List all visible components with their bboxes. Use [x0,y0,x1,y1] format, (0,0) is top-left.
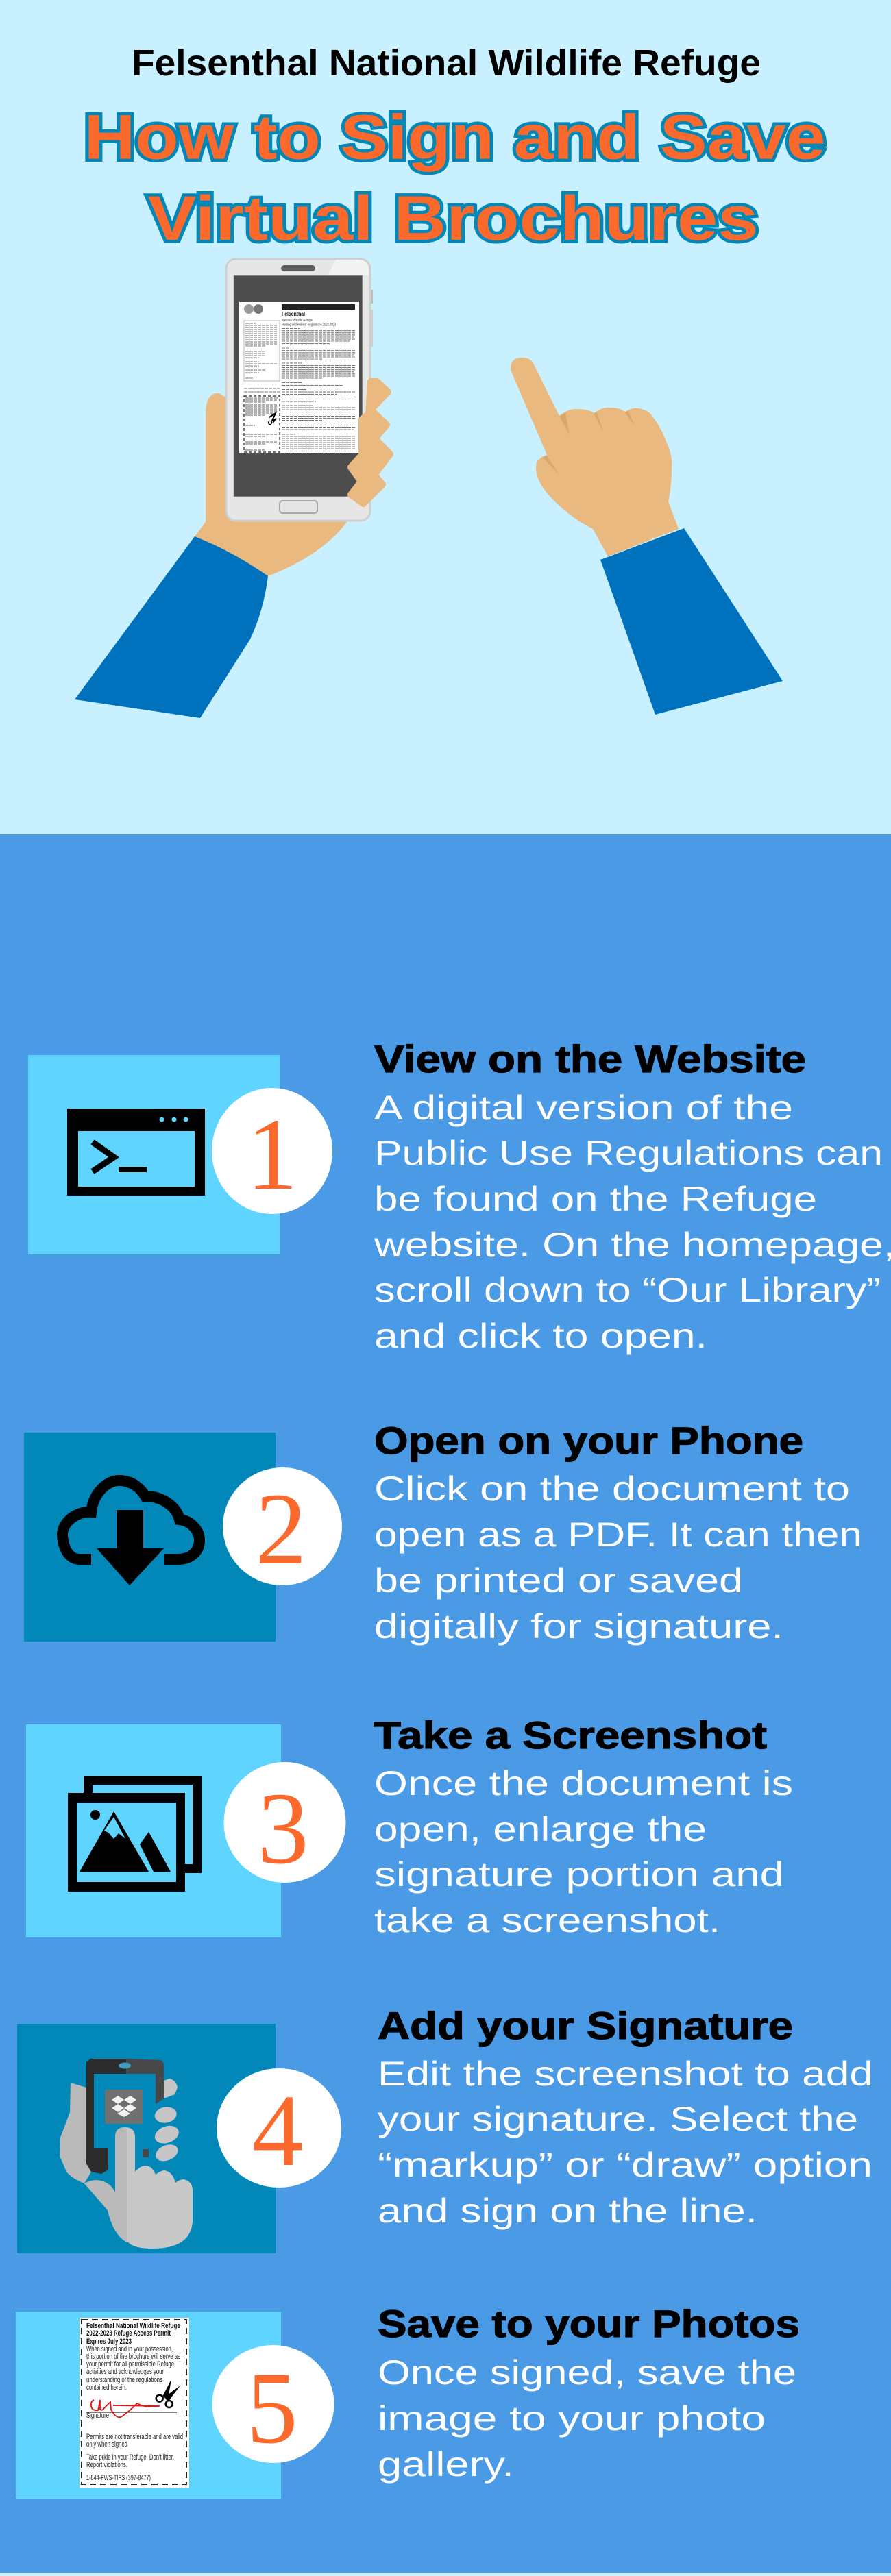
step 5 text: Once signed, save the [378,2353,796,2392]
signed permit ticket: Take pride in your Refuge. Don't litter. [86,2453,174,2462]
step 4 text: Edit the screenshot to add [378,2055,873,2093]
step 1 text: website. On the homepage, [374,1226,891,1264]
fingers [351,382,390,504]
signed permit ticket: understanding of the regulations [86,2376,162,2384]
step 4 text: and sign on the line. [378,2192,757,2230]
brochure on screen: Felsenthal [282,310,305,317]
panel: header [75,42,825,718]
step 1 text: Public Use Regulations can [374,1134,883,1172]
icon: image gallery [68,1776,202,1892]
number badge 1 [212,1088,332,1214]
signed permit ticket: only when signed [86,2440,127,2449]
number badge 1: 1 [247,1098,297,1211]
step 1 [28,1037,891,1355]
signed permit ticket: Expires July 2023 [86,2338,132,2346]
number badge 2: 2 [255,1472,307,1586]
signed permit ticket: Report violations. [86,2461,127,2469]
step 3 heading: Take a Screenshot [374,1713,767,1757]
step 1 text: be found on the Refuge [374,1180,817,1218]
step 1 text: A digital version of the [374,1089,793,1127]
step 1 text: and click to open. [374,1317,707,1355]
signed permit ticket: Felsenthal National Wildlife Refuge [86,2322,180,2330]
signed permit ticket: 2022-2023 Refuge Access Permit [86,2329,171,2338]
main title [84,103,825,253]
step 2 [24,1419,862,1646]
number badge 2 [223,1467,342,1586]
step 3 text: Once the document is [374,1764,793,1803]
step 2 text [374,1470,862,1646]
number badge 4: 4 [252,2074,303,2188]
signature scrawl [91,2400,160,2417]
step 1 heading: View on the Website [374,1037,806,1080]
signed permit ticket: Signature [86,2412,109,2420]
icon: terminal window [67,1109,205,1196]
step 4 text: your signature. Select the [378,2100,858,2138]
step 5 text: image to your photo [378,2399,766,2438]
step 2 text: be printed or saved [374,1561,743,1600]
main title: Virtual Brochures [148,184,758,253]
illustration: left hand holding phone [75,259,390,718]
step 4 icon box [17,2024,276,2253]
signed permit ticket: 1-844-FWS-TIPS (397-8477) [86,2474,151,2482]
signed permit ticket: When signed and in your possession, [86,2345,173,2353]
step 2 heading: Open on your Phone [374,1419,803,1462]
signed permit ticket [80,2318,189,2488]
icon: hand tapping phone [60,2059,193,2249]
brochure on screen [239,302,359,453]
step 5 icon box [16,2312,281,2499]
number badge 4 [217,2068,341,2188]
step 5 text [378,2353,796,2484]
refuge name heading: Felsenthal National Wildlife Refuge [132,42,761,84]
main title: How to Sign and Save [84,103,825,173]
step 3 text: open, enlarge the [374,1810,707,1848]
phone [226,259,373,521]
step 2 text: open as a PDF. It can then [374,1515,862,1554]
number badge 3: 3 [258,1772,308,1885]
number badge 5: 5 [247,2351,297,2465]
signed permit ticket: this portion of the brochure will serve as [86,2353,180,2361]
step 1 text [374,1089,891,1355]
step 3 icon box [26,1724,281,1937]
signed permit ticket: Permits are not transferable and are valid [86,2433,183,2441]
pointing hand [511,358,679,556]
step 2 text: Click on the document to [374,1470,850,1508]
step 1 text: scroll down to “Our Library” [374,1271,881,1309]
brochure on screen: National Wildlife Refuge [282,319,313,323]
step 5 [16,2302,800,2499]
illustration: right hand pointing [511,358,783,715]
step 2 text: digitally for signature. [374,1607,783,1646]
number badge 5 [212,2345,334,2465]
number badge 3 [223,1762,345,1885]
step 5 text: gallery. [378,2445,514,2484]
left sleeve [75,536,268,718]
right sleeve [600,528,783,715]
step 5 heading: Save to your Photos [378,2302,800,2345]
icon: cloud download [62,1481,199,1585]
knuckle folds [543,411,635,475]
palm [195,393,347,576]
icon: scissors [156,2379,180,2407]
signed permit ticket: activities and acknowledges your [86,2368,164,2376]
step 1 icon box [28,1055,280,1254]
signed permit ticket: your permit for all permissible Refuge [86,2360,174,2368]
step 4 [17,2004,873,2253]
step 3 text: signature portion and [374,1855,784,1894]
step 2 icon box [24,1433,276,1642]
signed permit ticket: contained herein. [86,2383,127,2392]
brochure on screen: Hunting and Harvest Regulations 2022-2023 [282,323,336,327]
step 4 text: “markup” or “draw” option [378,2146,872,2184]
step 3 [26,1713,793,1940]
step 3 text: take a screenshot. [374,1901,720,1940]
step 4 heading: Add your Signature [378,2004,793,2047]
step 4 text [378,2055,873,2230]
panel: steps background [0,834,891,2573]
step 3 text [374,1764,793,1940]
